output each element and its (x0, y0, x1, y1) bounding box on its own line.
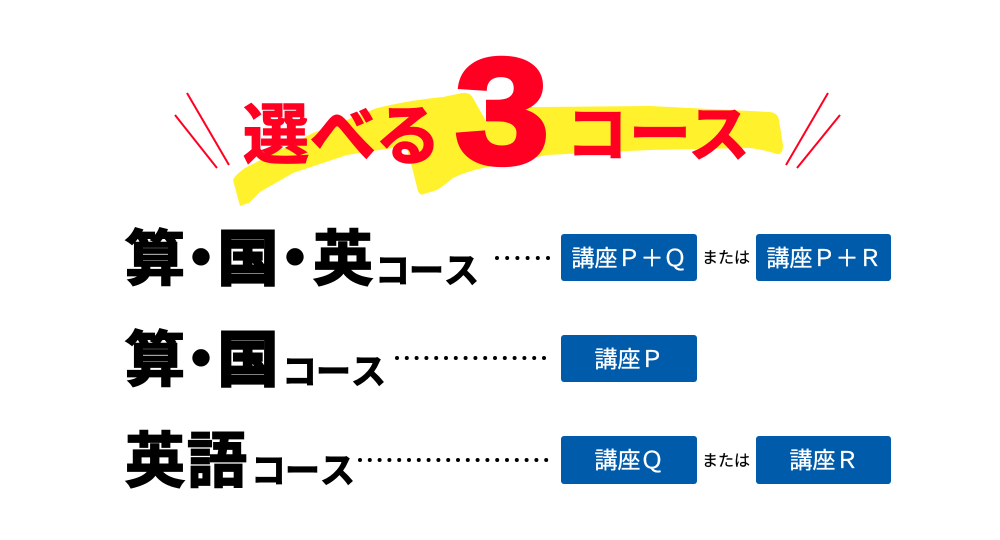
row 1 label: 算・国・英コース: ・ (171, 226, 231, 293)
row 3 label: 英語コース: ス (320, 452, 355, 491)
row 2 label: 算・国コース: 算 (125, 327, 185, 394)
icon: left accent lines (175, 93, 229, 168)
row 1 label: 算・国・英コース: ー (409, 252, 444, 291)
title: ー (629, 101, 691, 170)
title (243, 27, 750, 195)
row 3 label: 英語コース: コ (251, 452, 286, 491)
title: る (375, 99, 441, 173)
title: ス (688, 101, 750, 170)
row 3 label: 英語コース: ー (285, 452, 320, 491)
title: べ (310, 98, 376, 172)
row 1 または: または (702, 249, 750, 267)
row 1 label: 算・国・英コース: ・ (265, 226, 325, 293)
row 2 label: 算・国コース: ー (316, 353, 351, 392)
row 2 button: 講座P (561, 335, 697, 382)
row 3 label: 英語コース (125, 428, 355, 495)
row 2 label: 算・国コース (125, 327, 386, 394)
title: コ (566, 101, 628, 170)
row 1 button: 講座P+Q: 講座Ｐ＋Ｑ (572, 245, 686, 271)
row 3 button: 講座Q: 講座Ｑ (594, 447, 664, 473)
row 3 button: 講座Q (561, 436, 697, 484)
row 3 または: または (702, 452, 750, 470)
icon: right accent lines (786, 93, 840, 168)
icon: yellow brush stroke (233, 93, 783, 206)
title: 選 (243, 98, 309, 172)
row 1 button: 講座P+R: 講座Ｐ＋Ｒ (766, 245, 882, 271)
row 1 label: 算・国・英コース (125, 226, 479, 293)
row 1 button: 講座P+R (756, 234, 891, 281)
row 2 label: 算・国コース: ・ (171, 327, 231, 394)
row 3 label: 英語コース: 語 (187, 428, 247, 495)
row 1 label: 算・国・英コース: 英 (313, 226, 373, 293)
row 2 button: 講座P: 講座Ｐ (594, 346, 664, 372)
title: 3 (455, 27, 549, 195)
row 1 label: 算・国・英コース: コ (375, 252, 410, 291)
row 3 button: 講座R: 講座Ｒ (790, 447, 858, 473)
row 2 label: 算・国コース: 国 (218, 327, 278, 394)
row 2 dotted leader (397, 356, 548, 360)
row 3 dotted leader (360, 458, 548, 462)
row 1 label: 算・国・英コース: 算 (125, 226, 185, 293)
row 2 label: 算・国コース: コ (282, 353, 317, 392)
row 1 button: 講座P+Q (561, 234, 697, 281)
row 2 label: 算・国コース: ス (351, 353, 386, 392)
row 3 label: 英語コース: 英 (125, 428, 185, 495)
row 1 label: 算・国・英コース: ス (444, 252, 479, 291)
row 1 dotted leader (497, 256, 552, 260)
row 3 button: 講座R (756, 436, 891, 484)
row 1 label: 算・国・英コース: 国 (218, 226, 278, 293)
